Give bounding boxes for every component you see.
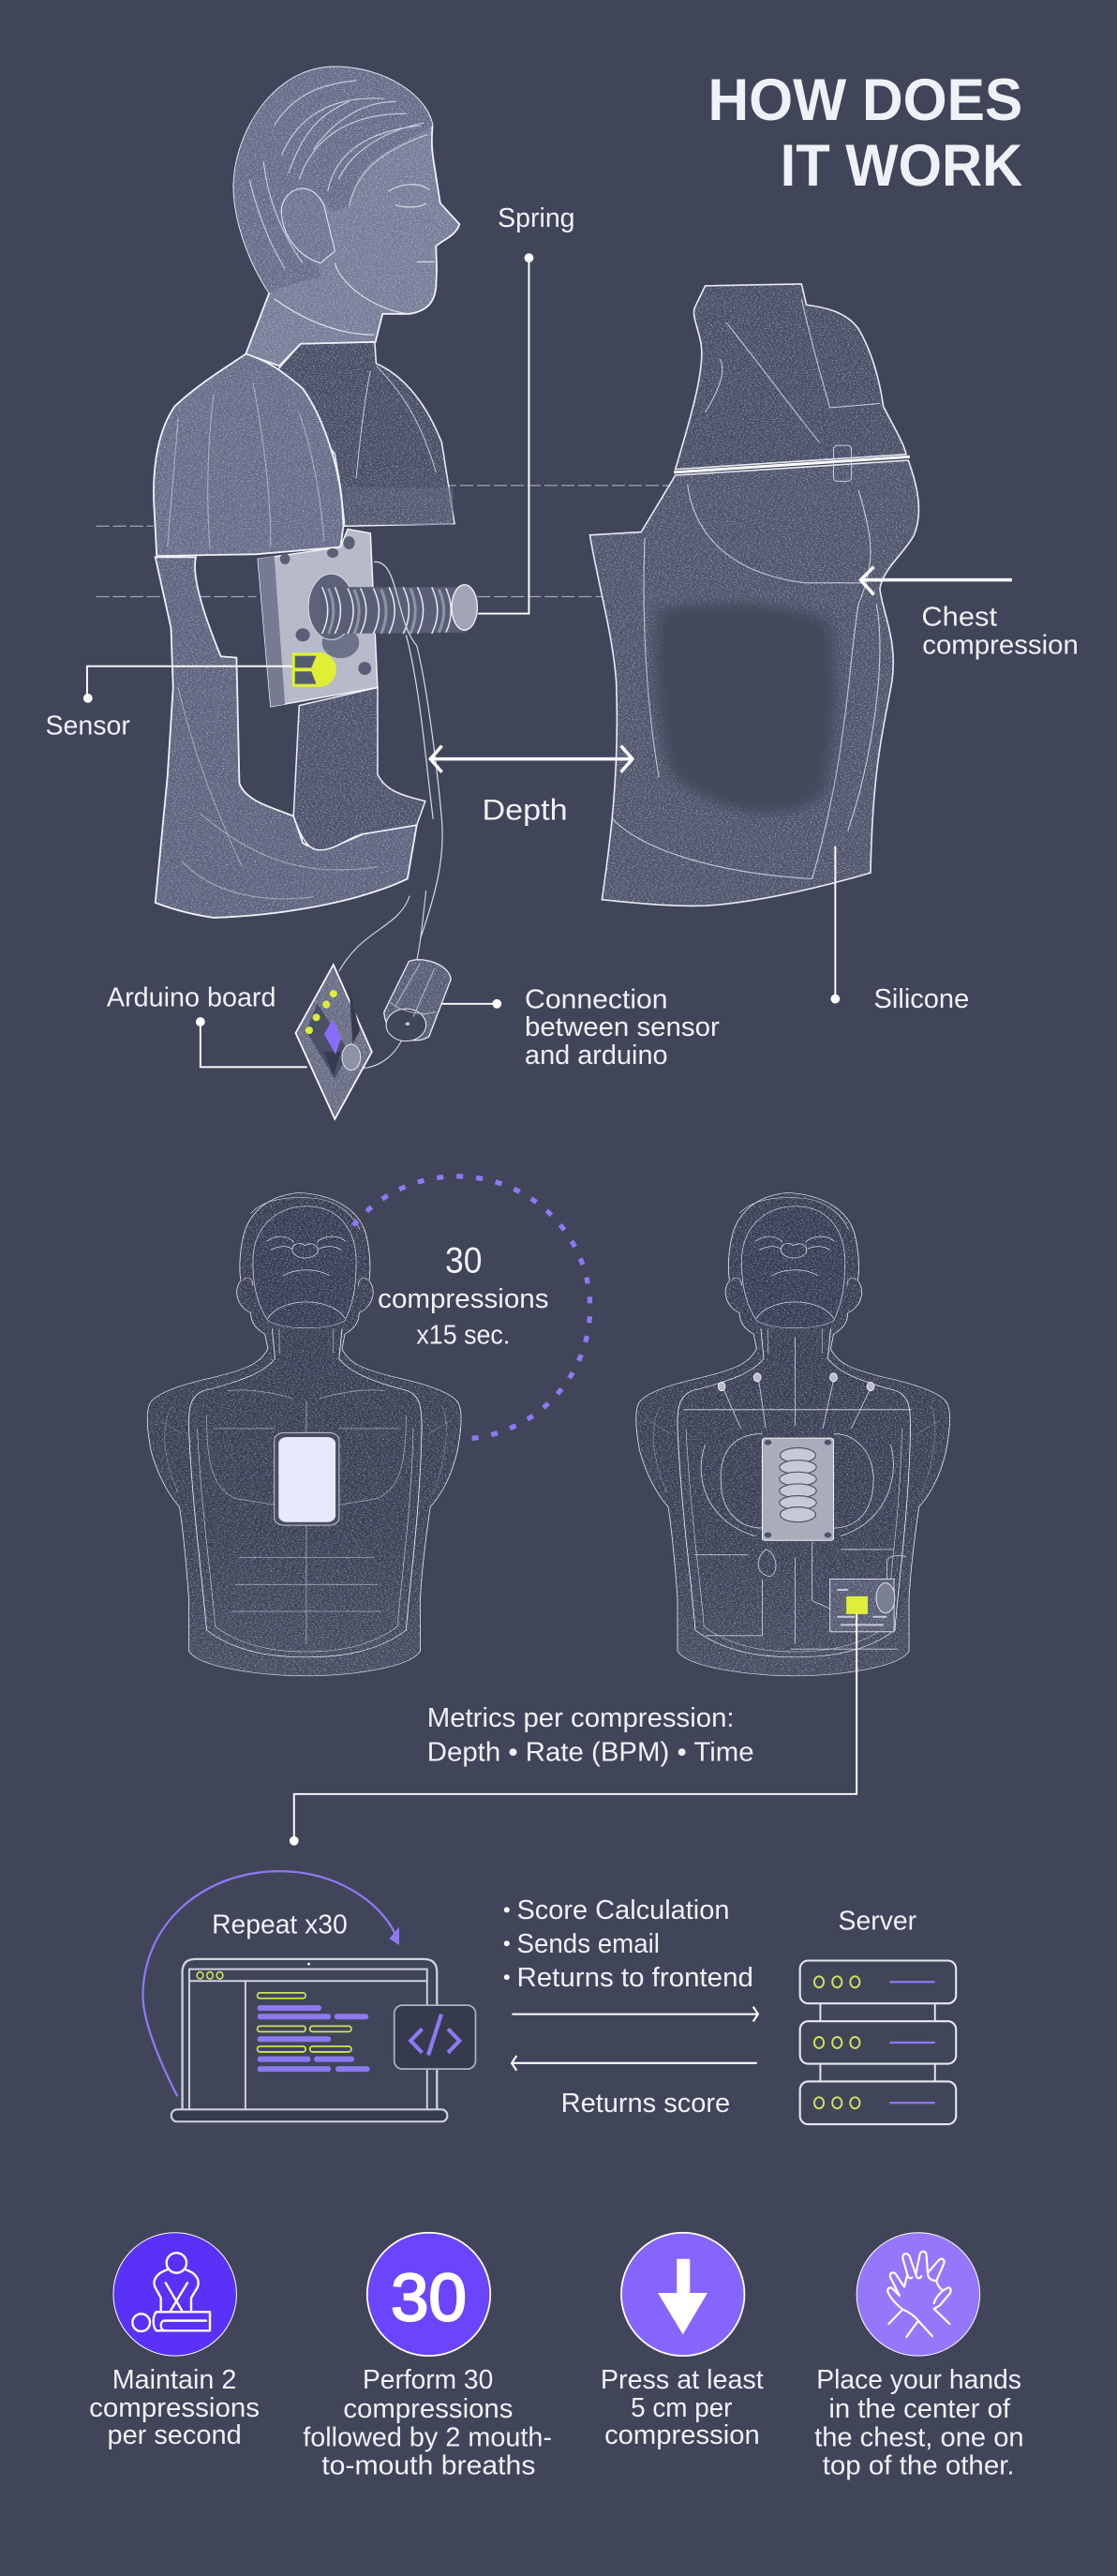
callout: connection: and arduino — [525, 1041, 668, 1071]
tip 1: maintain rate: Maintain 2 — [112, 2365, 236, 2395]
icon: arduino board — [296, 965, 372, 1119]
tip 1: maintain rate: compressions — [89, 2393, 260, 2423]
torso: shoulder and arm piece — [154, 354, 343, 556]
callout: chest compression: compression — [922, 631, 1079, 661]
metal spring plate — [258, 529, 378, 707]
tip 2: thirty compressions: to-mouth breaths — [321, 2450, 535, 2480]
panel: manikin front view — [147, 1192, 461, 1676]
dotted circle — [353, 1176, 590, 1439]
callout: silicone — [830, 846, 969, 1014]
callout: silicone: Silicone — [874, 984, 969, 1014]
icon: server stack — [800, 1960, 956, 2124]
spring plate — [762, 1438, 833, 1540]
callout: spring: Spring — [498, 203, 575, 233]
callout: sensor: Sensor — [46, 711, 130, 741]
tip 1: maintain rate: per second — [107, 2420, 242, 2450]
callout: chest compression — [861, 567, 1079, 661]
title: IT WORK — [781, 133, 1022, 199]
title: HOW DOES — [708, 67, 1022, 133]
repeat label: Repeat x30 — [212, 1910, 348, 1940]
tip 3: press depth: Press at least — [601, 2365, 764, 2395]
torso: lower side piece — [156, 557, 417, 918]
torso: inner belly piece — [293, 687, 425, 850]
tip 4: hand placement: Place your hands — [816, 2365, 1021, 2395]
arrow: from server — [512, 2056, 757, 2071]
callout: 30 compressions: compressions — [378, 1284, 548, 1314]
callout: 30 compressions: x15 sec. — [416, 1321, 510, 1351]
circuit board — [830, 1580, 895, 1632]
bullet list: Score Calculation — [516, 1895, 729, 1925]
tip 4: hand placement — [814, 2233, 1024, 2480]
title — [708, 67, 1022, 199]
silicone chest: upper part — [676, 284, 906, 470]
returns score label: Returns score — [561, 2089, 730, 2119]
callout: connection: between sensor — [525, 1012, 720, 1042]
callout: chest compression: Chest — [921, 603, 997, 633]
chest pad — [275, 1432, 339, 1525]
icon: CPR person — [113, 2233, 236, 2356]
head and neck — [233, 67, 459, 366]
chest muscle lines — [206, 1390, 406, 1643]
callout: depth arrow — [430, 746, 633, 827]
panel: manikin internal view — [636, 1192, 950, 1676]
silicone seam — [674, 457, 910, 472]
electrodes — [718, 1373, 874, 1391]
connector line to laptop — [290, 1613, 856, 1846]
icon: connector cylinder — [384, 960, 451, 1041]
bullet list — [504, 1895, 753, 1993]
callout: 30 compressions — [378, 1240, 548, 1351]
server label: Server — [839, 1906, 917, 1936]
tip 2: thirty compressions: Perform 30 — [363, 2365, 493, 2395]
tip 2: thirty compressions: 30 — [391, 2260, 467, 2335]
callout: 30 compressions: 30 — [445, 1240, 482, 1281]
repeat arc arrow — [143, 1871, 399, 2096]
metrics text — [427, 1703, 754, 1768]
arduino and connector assembly — [296, 891, 451, 1119]
metrics text: Metrics per compression: — [427, 1703, 735, 1733]
silicone chest: lower part — [589, 445, 918, 906]
tip 2: thirty compressions — [303, 2233, 552, 2480]
tip 3: press depth — [601, 2233, 764, 2450]
torso: chest front piece — [277, 342, 454, 526]
tip 4: hand placement: the chest, one on — [814, 2423, 1024, 2453]
icon: overlapping hands — [856, 2233, 980, 2356]
callout: depth arrow: Depth — [482, 793, 568, 827]
wires — [339, 891, 426, 1069]
tip 2: thirty compressions: followed by 2 mouth- — [303, 2423, 552, 2453]
tip 4: hand placement: in the center of — [828, 2394, 1011, 2424]
tip 1: maintain rate — [89, 2233, 260, 2450]
silicone dark window — [656, 604, 836, 813]
sensor highlight — [292, 652, 336, 687]
spring — [308, 574, 477, 639]
callout: arduino board: Arduino board — [107, 982, 276, 1012]
callout: sensor — [46, 666, 292, 741]
callout: arduino board — [107, 982, 307, 1067]
callout: connection — [442, 985, 720, 1071]
tip 2: thirty compressions: compressions — [343, 2394, 513, 2424]
icon: code brackets — [395, 2005, 475, 2069]
bullet list: Sends email — [516, 1929, 660, 1959]
metrics text: Depth • Rate (BPM) • Time — [427, 1738, 754, 1768]
internal wiring — [684, 1337, 912, 1649]
callout: spring — [478, 203, 575, 614]
tip 4: hand placement: top of the other. — [823, 2450, 1015, 2480]
tip 3: press depth: compression — [604, 2420, 760, 2450]
yellow marker — [846, 1596, 868, 1614]
callout: connection: Connection — [525, 985, 668, 1015]
cable from sensor — [374, 562, 442, 938]
icon: laptop with code — [171, 1959, 475, 2121]
bullet list: Returns to frontend — [516, 1963, 753, 1993]
tip 3: press depth: 5 cm per — [631, 2393, 733, 2423]
dashed alignment lines — [97, 486, 673, 596]
arrow: to server — [512, 2007, 758, 2022]
panel: exploded side view of the manikin — [97, 67, 918, 938]
